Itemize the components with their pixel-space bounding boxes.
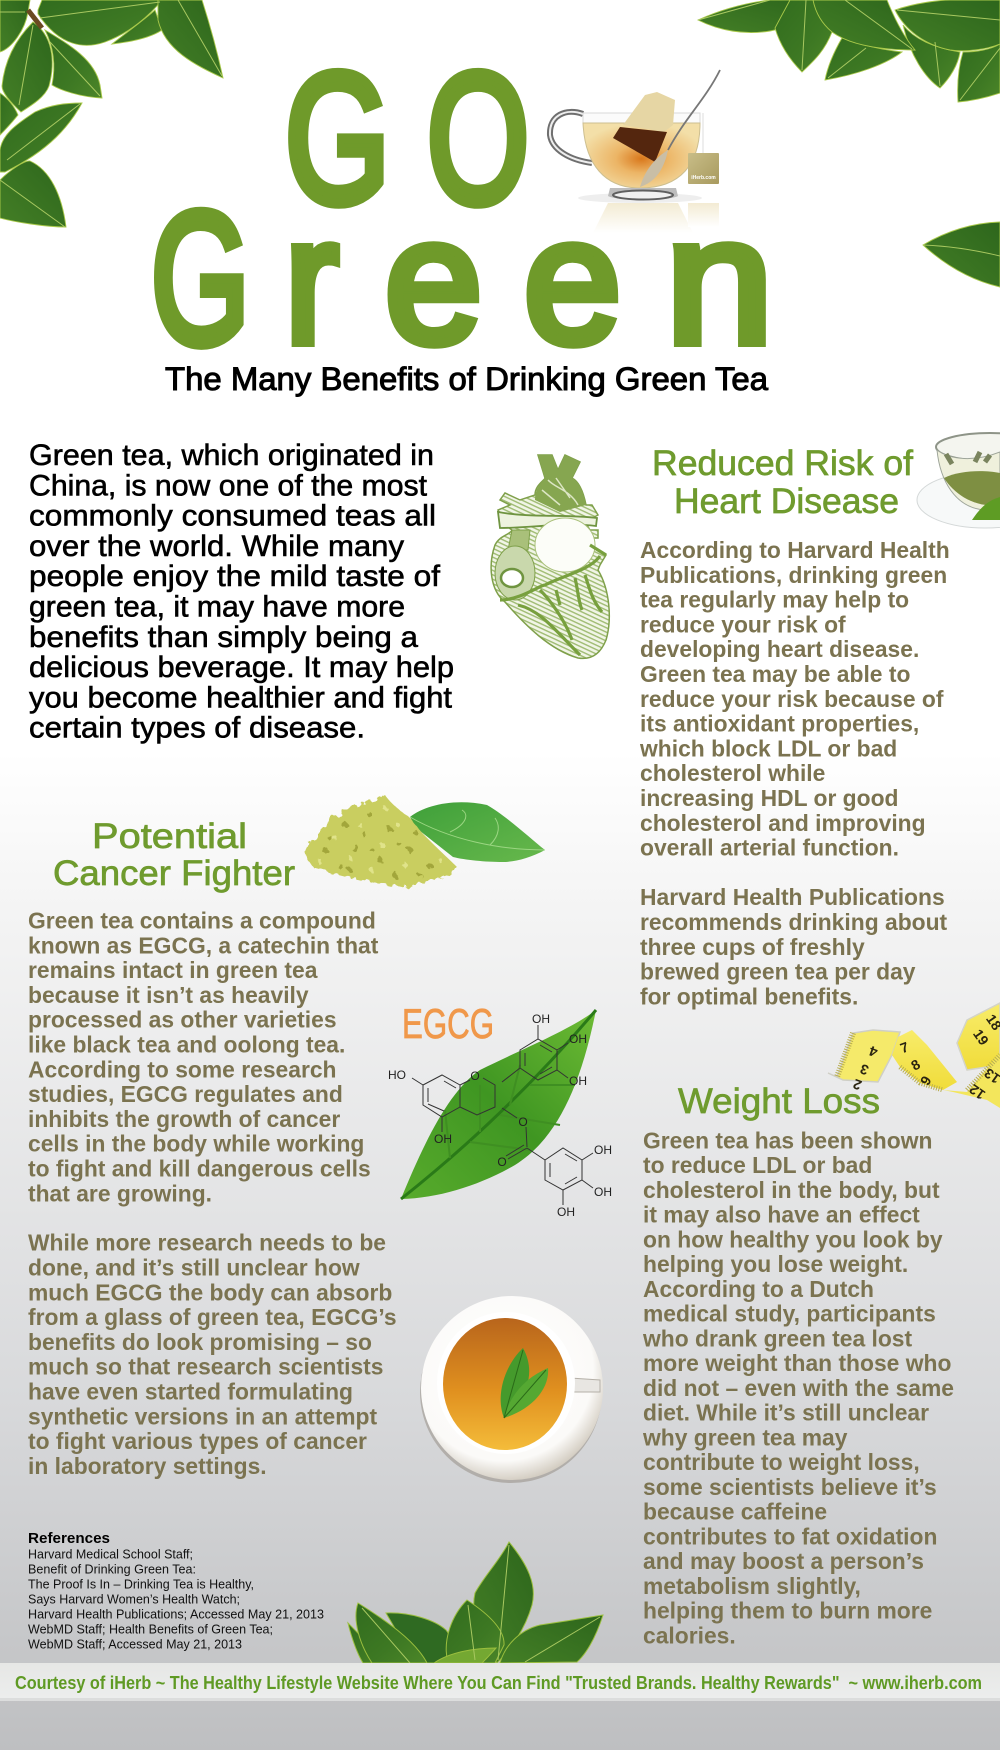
body text: weight loss: calories. — [643, 1622, 736, 1648]
subtitle: The Many Benefits of Drinking Green Tea — [165, 361, 768, 397]
title: Go Green: r — [285, 181, 338, 380]
heading: potential cancer fighter: Potential — [92, 817, 247, 856]
body text: cancer fighter: remains intact in green tea — [28, 957, 318, 983]
icon: tea leaf with EGCG molecule: OH — [594, 1143, 612, 1157]
title: Go Green: e — [524, 181, 621, 380]
body text: heart disease: for optimal benefits. — [640, 983, 858, 1009]
icon: matcha powder and leaf — [305, 795, 545, 887]
body text: cancer fighter: benefits do look promising – so — [28, 1329, 372, 1355]
references: Harvard Medical School Staff; — [28, 1548, 193, 1562]
body text: weight loss: why green tea may — [642, 1424, 848, 1450]
intro text block: green tea, it may have more — [29, 590, 405, 624]
leaves: top left cluster — [0, 0, 223, 227]
body text: weight loss: and may boost a person’s — [643, 1548, 924, 1574]
body text: weight loss: on how healthy you look by — [643, 1226, 943, 1252]
references — [28, 1531, 324, 1652]
body text: weight loss: some scientists believe it’s — [643, 1474, 937, 1500]
body text: heart disease: which block LDL or bad — [639, 735, 897, 761]
icon: tea leaf with EGCG molecule: OH — [434, 1132, 452, 1146]
heading: reduced risk of heart disease: Heart Disease — [674, 482, 899, 521]
icon: tea leaf with EGCG molecule: OH — [557, 1205, 575, 1219]
body text: cancer fighter: to fight various types of cancer — [28, 1428, 367, 1454]
icon: tea leaf with EGCG molecule: OH — [569, 1074, 587, 1088]
body text: heart disease: According to Harvard Health — [640, 537, 950, 563]
leaves: bottom cluster — [348, 1542, 603, 1663]
heading: EGCG: EGCG — [402, 1000, 494, 1047]
intro text block: certain types of disease. — [29, 712, 365, 745]
icon: measuring tape: 9 — [917, 1073, 935, 1088]
body text: weight loss: who drank green tea lost — [642, 1325, 912, 1351]
references: Benefit of Drinking Green Tea: — [28, 1562, 196, 1576]
icon: measuring tape: 3 — [858, 1061, 871, 1079]
body text: heart disease: overall arterial function. — [640, 835, 899, 861]
body text: cancer fighter: studies, EGCG regulates and — [28, 1081, 343, 1107]
intro text block: benefits than simply being a — [29, 621, 418, 654]
body text: heart disease: reduce your risk because of — [640, 686, 944, 712]
body text: cancer fighter: cells in the body while working — [28, 1131, 364, 1157]
body text: heart disease: Green tea may be able to — [640, 661, 910, 687]
body text: heart disease: increasing HDL or good — [640, 785, 898, 811]
body text: heart disease: three cups of freshly — [640, 934, 865, 960]
title: Go Green: O — [427, 36, 529, 242]
body text: cancer fighter: processed as other varieties — [28, 1007, 337, 1033]
body text: cancer fighter: synthetic versions in an attempt — [28, 1403, 377, 1429]
icon: glass of green tea on saucer — [917, 433, 1000, 528]
icon: tea leaf with EGCG molecule: O — [497, 1155, 507, 1169]
body text: heart disease: developing heart disease. — [640, 636, 919, 662]
icon: tea leaf with EGCG molecule: OH — [532, 1012, 550, 1026]
references: WebMD Staff; Health Benefits of Green Tea; — [28, 1622, 273, 1636]
body text: cancer fighter: from a glass of green tea, EGCG’s — [28, 1304, 397, 1330]
heading: weight loss: Weight Loss — [678, 1082, 880, 1121]
title: Go Green: G — [151, 173, 250, 383]
body text: weight loss: helping them to burn more — [643, 1598, 932, 1624]
body text: cancer fighter: because it isn’t as heavily — [28, 982, 309, 1008]
body text: weight loss: because caffeine — [643, 1499, 827, 1525]
title: Go Green: n — [666, 181, 773, 380]
body text: cancer fighter: While more research needs to be — [28, 1230, 386, 1256]
icon: measuring tape — [828, 1003, 1000, 1108]
icon: measuring tape: 19 — [970, 1026, 992, 1048]
body text: weight loss: Green tea has been shown — [643, 1127, 932, 1153]
body text: weight loss: metabolism slightly, — [643, 1573, 861, 1599]
references: The Proof Is In – Drinking Tea is Healthy, — [28, 1578, 254, 1592]
icon: tea leaf with EGCG molecule — [388, 1010, 612, 1219]
body text: cancer fighter: done, and it’s still unclear how — [28, 1254, 360, 1280]
icon: measuring tape: 2 — [851, 1076, 864, 1094]
icon: tea leaf with EGCG molecule: HO — [388, 1068, 406, 1082]
references: Says Harvard Women’s Health Watch; — [28, 1592, 240, 1606]
body text: weight loss: did not – even with the same — [643, 1375, 954, 1401]
body text: heart disease: tea regularly may help to — [640, 587, 909, 613]
footer band — [0, 1663, 1000, 1701]
body text: cancer fighter: much so that research scientists — [28, 1354, 383, 1380]
body text: weight loss: According to a Dutch — [643, 1276, 874, 1302]
body text: weight loss: diet. While it’s still unclear — [643, 1400, 929, 1426]
intro text block: you become healthier and fight — [29, 681, 453, 714]
intro text block: delicious beverage. It may help — [29, 651, 454, 684]
title: Go Green — [151, 36, 773, 383]
body text: weight loss: more weight than those who — [643, 1350, 951, 1376]
body text: weight loss: it may also have an effect — [643, 1202, 920, 1228]
intro text block: over the world. While many — [29, 530, 404, 563]
intro text block: China, is now one of the most — [29, 469, 428, 502]
body text: cancer fighter: much EGCG the body can absorb — [28, 1279, 392, 1305]
intro text block: commonly consumed teas all — [29, 500, 436, 533]
body text: weight loss: to reduce LDL or bad — [643, 1152, 872, 1178]
icon: tea leaf with EGCG molecule: OH — [594, 1185, 612, 1199]
body text: weight loss: medical study, participants — [643, 1301, 936, 1327]
title: Go Green: G — [285, 36, 390, 242]
body text: weight loss: contributes to fat oxidation — [643, 1523, 937, 1549]
body text: cancer fighter: known as EGCG, a catechin that — [28, 932, 379, 958]
references: WebMD Staff; Accessed May 21, 2013 — [28, 1638, 242, 1652]
body text: heart disease: cholesterol and improving — [640, 810, 926, 836]
title: Go Green: e — [385, 181, 482, 380]
icon: tea leaf with EGCG molecule: O — [518, 1115, 528, 1129]
body text: heart disease: reduce your risk of — [640, 611, 846, 637]
leaf: right edge — [923, 222, 1000, 287]
body text: cancer fighter: According to some research — [28, 1056, 336, 1082]
body text: weight loss: helping you lose weight. — [643, 1251, 908, 1277]
body text: weight loss: contribute to weight loss, — [643, 1449, 920, 1475]
body text: cancer fighter: that are growing. — [28, 1180, 212, 1206]
body text: cancer fighter: in laboratory settings. — [28, 1453, 267, 1479]
leaves: top right cluster — [698, 0, 1000, 102]
body text: cancer fighter: inhibits the growth of cancer — [28, 1106, 340, 1132]
body text: heart disease: brewed green tea per day — [640, 959, 916, 985]
body text: weight loss: cholesterol in the body, but — [643, 1177, 940, 1203]
intro text block: people enjoy the mild taste of — [29, 560, 441, 593]
body text: cancer fighter: to fight and kill dangerous cells — [28, 1156, 371, 1182]
icon: cup of tea on saucer — [420, 1296, 603, 1483]
icon: measuring tape: 12 — [966, 1081, 988, 1103]
body text: cancer fighter: Green tea contains a compound — [28, 908, 376, 934]
body text: heart disease: its antioxidant properties, — [640, 711, 919, 737]
body text: heart disease: recommends drinking about — [640, 909, 948, 935]
icon: measuring tape: 7 — [898, 1038, 911, 1056]
icon: tea leaf with EGCG molecule: O — [470, 1069, 480, 1083]
body text: heart disease: Harvard Health Publications — [640, 884, 945, 910]
intro text block: Green tea, which originated in — [29, 439, 434, 472]
references: References — [28, 1531, 110, 1547]
icon: anatomical heart — [491, 455, 609, 658]
heading: reduced risk of heart disease: Reduced Risk of — [652, 444, 913, 483]
heading: potential cancer fighter: Cancer Fighter — [53, 854, 295, 893]
icon: measuring tape: 4 — [867, 1043, 880, 1061]
icon: glass tea cup with tea bag — [550, 70, 720, 233]
body text: heart disease: Publications, drinking green — [640, 562, 947, 588]
body text: heart disease: cholesterol while — [640, 760, 825, 786]
icon: glass tea cup with tea bag: iHerb.com — [691, 175, 716, 181]
icon: measuring tape: 8 — [908, 1056, 923, 1074]
body text: cancer fighter: have even started formulating — [28, 1378, 353, 1404]
icon: tea leaf with EGCG molecule: OH — [569, 1032, 587, 1046]
body text: cancer fighter: like black tea and oolong tea. — [28, 1032, 345, 1058]
references: Harvard Health Publications; Accessed May 21, 2013 — [28, 1608, 324, 1622]
